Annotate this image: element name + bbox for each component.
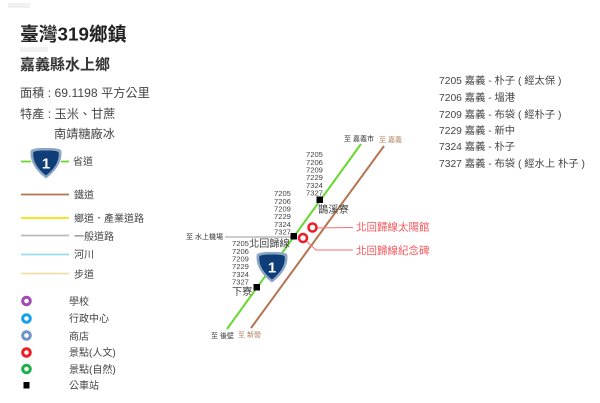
legend: cultural attraction	[23, 346, 116, 359]
bus route list: 7209 嘉義 - 布袋 ( 經朴子 )	[439, 108, 561, 121]
map: route numbers upper: 7209	[306, 166, 323, 174]
bus route list	[439, 74, 585, 170]
legend: township road: 鄉道．產業道路	[74, 212, 144, 225]
map: general road	[225, 236, 294, 238]
legend: general road	[21, 230, 114, 243]
legend: river: 河川	[74, 249, 94, 261]
legend: provincial highway: 1	[42, 156, 50, 172]
legend: administration	[23, 312, 109, 325]
legend: natural attraction	[23, 363, 116, 376]
map: bus stop lower	[254, 284, 260, 290]
map: route numbers middle: 7327	[274, 228, 291, 236]
map: route numbers upper: 7327	[306, 188, 323, 198]
map: solar museum marker	[308, 224, 316, 232]
map: route numbers lower: 7229	[232, 262, 249, 271]
legend: provincial highway	[21, 148, 93, 179]
map label: to airport: 至 水上機場	[186, 232, 223, 241]
legend: bus stop	[24, 379, 99, 392]
legend: bus stop: 公車站	[69, 379, 99, 392]
map: railway	[251, 146, 384, 328]
legend: provincial highway: 省道	[73, 155, 93, 168]
map: route numbers lower	[232, 239, 249, 286]
bus route list: 7327 嘉義 - 布袋 ( 經水上 朴子 )	[439, 157, 585, 170]
map: provincial highway	[227, 144, 361, 329]
map label: to Xinying: 至 新營	[238, 330, 261, 339]
map: route numbers middle: 7205	[274, 189, 291, 198]
legend: trail	[21, 268, 94, 281]
text: area: 面積 : 69.1198 平方公里	[20, 85, 150, 100]
text: specialties: 南靖糖廠冰	[54, 126, 115, 141]
legend: river	[21, 249, 94, 261]
map label: stop middle: 北回歸線	[249, 237, 290, 250]
bus route list: 7205 嘉義 - 朴子 ( 經太保 )	[439, 74, 561, 87]
map: route numbers upper: 7229	[306, 173, 323, 182]
map: route numbers middle: 7229	[274, 212, 291, 221]
legend: railway: 鐵道	[74, 188, 94, 202]
legend: natural attraction: 景點(自然)	[69, 363, 116, 376]
legend: trail: 步道	[74, 268, 94, 281]
legend: railway	[21, 188, 94, 202]
map: route numbers lower: 7209	[232, 254, 249, 264]
map: route numbers lower: 7205	[232, 239, 249, 248]
map: route numbers lower: 7324	[232, 270, 249, 279]
map: connector to monument	[303, 238, 353, 250]
map: highway shield: 1	[268, 260, 276, 276]
map: route numbers lower: 7206	[232, 247, 249, 256]
legend: general road: 一般道路	[74, 230, 114, 243]
map: route numbers middle: 7324	[274, 220, 291, 229]
map: bus stop middle	[290, 233, 297, 240]
map: route numbers middle	[274, 189, 291, 236]
map: bus stop upper	[316, 196, 323, 203]
faded subheader mark	[20, 47, 48, 52]
map label: monument: 北回歸線紀念碑	[356, 244, 430, 257]
map label: to Chiayi city: 至 嘉義市	[344, 134, 374, 143]
map: route numbers middle: 7206	[274, 197, 291, 206]
bus route list: 7324 嘉義 - 朴子	[439, 140, 515, 153]
map: monument marker	[299, 234, 307, 242]
subtitle: township: 嘉義縣水上鄉	[20, 56, 110, 74]
map: route numbers upper: 7205	[306, 150, 323, 159]
map: route numbers upper: 7324	[306, 181, 323, 190]
map label: solar museum: 北回歸線太陽館	[356, 220, 430, 234]
faded header mark	[8, 3, 30, 8]
legend: township road	[21, 212, 144, 225]
bus route list: 7206 嘉義 - 塭港	[439, 91, 516, 104]
legend: school: 學校	[69, 295, 89, 308]
legend: cultural attraction: 景點(人文)	[69, 346, 116, 359]
map label: stop lower: 下寮	[232, 285, 252, 298]
legend: shop	[23, 330, 89, 343]
legend: school	[23, 295, 89, 308]
map: route numbers upper: 7206	[306, 158, 323, 167]
title: 臺灣319鄉鎮	[20, 22, 127, 44]
map: route numbers middle: 7209	[274, 204, 291, 214]
map label: to Houbi: 至 後壁	[211, 331, 234, 340]
map: route numbers upper	[306, 150, 323, 198]
legend: shop: 商店	[69, 330, 89, 343]
bus route list: 7229 嘉義 - 新中	[439, 124, 515, 137]
map label: stop upper: 鵲溪寮	[318, 203, 349, 216]
map: connector to solar museum	[312, 226, 353, 229]
text: specialties: 特產 : 玉米、甘蔗	[20, 106, 115, 121]
map: route numbers lower: 7327	[232, 278, 249, 286]
legend: administration: 行政中心	[69, 312, 109, 325]
text: specialties	[20, 106, 115, 141]
map: highway shield	[256, 252, 288, 282]
map label: to Chiayi station: 至 嘉義	[379, 135, 402, 144]
